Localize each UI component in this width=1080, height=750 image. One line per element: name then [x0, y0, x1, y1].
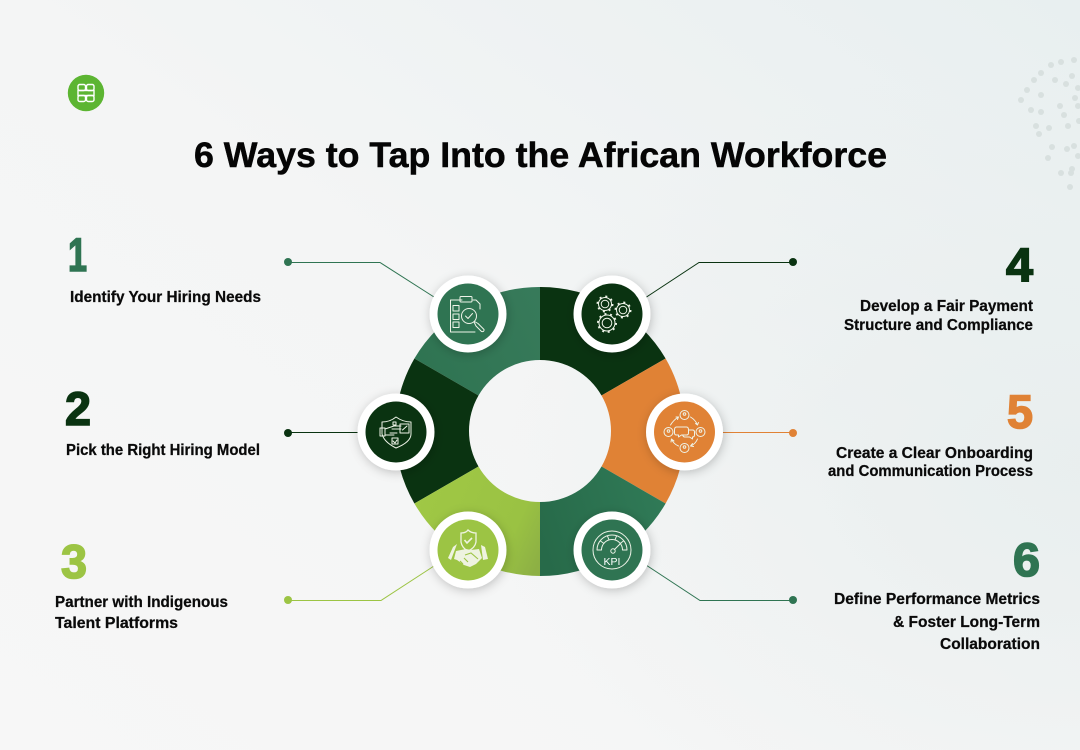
logo badge	[68, 75, 104, 111]
decorative dot pattern	[1018, 57, 1080, 190]
number 2: 2	[65, 382, 91, 435]
connector: item 2	[284, 429, 360, 437]
icon: shield with documents	[358, 394, 434, 470]
icon: KPI gauge: KPI	[604, 556, 620, 568]
ring segment 5	[602, 358, 685, 504]
number 1: 1	[68, 228, 87, 281]
ring segment 3	[414, 466, 540, 576]
donut ring	[395, 287, 685, 576]
label: Define Performance Metrics & Foster Long-Term Collaboration	[834, 591, 1040, 653]
label: Identify Your Hiring Needs: Identify Your Hiring Needs	[70, 289, 261, 306]
label: Define Performance Metrics & Foster Long-Term Collaboration: Collaboration	[940, 636, 1040, 653]
icon: clipboard checklist with magnifier	[430, 276, 506, 352]
number 6: 6	[1013, 533, 1040, 586]
label: Pick the Right Hiring Model: Pick the Right Hiring Model	[66, 442, 260, 459]
label: Define Performance Metrics & Foster Long-Term Collaboration: Define Performance Metrics	[834, 591, 1040, 608]
connector: item 5	[720, 429, 797, 437]
number 3: 3	[61, 535, 87, 588]
ring segment 2	[395, 358, 478, 504]
connector: item 6	[646, 565, 797, 604]
number 4: 4	[1006, 238, 1033, 291]
ring segment 1	[414, 287, 540, 396]
ring segment 6	[540, 466, 666, 576]
label: Develop a Fair Payment Structure and Compliance: Structure and Compliance	[844, 317, 1033, 334]
icon: KPI gauge	[574, 512, 650, 588]
label: Create a Clear Onboarding and Communication Process: Create a Clear Onboarding	[836, 445, 1033, 462]
label: Create a Clear Onboarding and Communication Process	[828, 445, 1033, 480]
connector: item 1	[284, 258, 434, 297]
icon: three gears	[574, 276, 650, 352]
connector: item 4	[645, 258, 797, 298]
label: Develop a Fair Payment Structure and Compliance	[844, 298, 1033, 334]
icon: handshake with shield	[430, 512, 506, 588]
icon: communication cycle	[646, 394, 723, 470]
label: Create a Clear Onboarding and Communication Process: and Communication Process	[828, 463, 1033, 480]
label: Partner with Indigenous Talent Platforms	[55, 594, 228, 632]
number 5: 5	[1007, 385, 1033, 438]
label: Partner with Indigenous Talent Platforms: Talent Platforms	[55, 615, 178, 632]
label: Develop a Fair Payment Structure and Compliance: Develop a Fair Payment	[860, 298, 1033, 315]
label: Define Performance Metrics & Foster Long-Term Collaboration: & Foster Long-Term	[893, 614, 1040, 631]
ring segment 4	[540, 287, 666, 396]
title: 6 Ways to Tap Into the African Workforce	[194, 136, 887, 175]
connector: item 3	[284, 566, 434, 604]
label: Partner with Indigenous Talent Platforms: Partner with Indigenous	[55, 594, 228, 611]
